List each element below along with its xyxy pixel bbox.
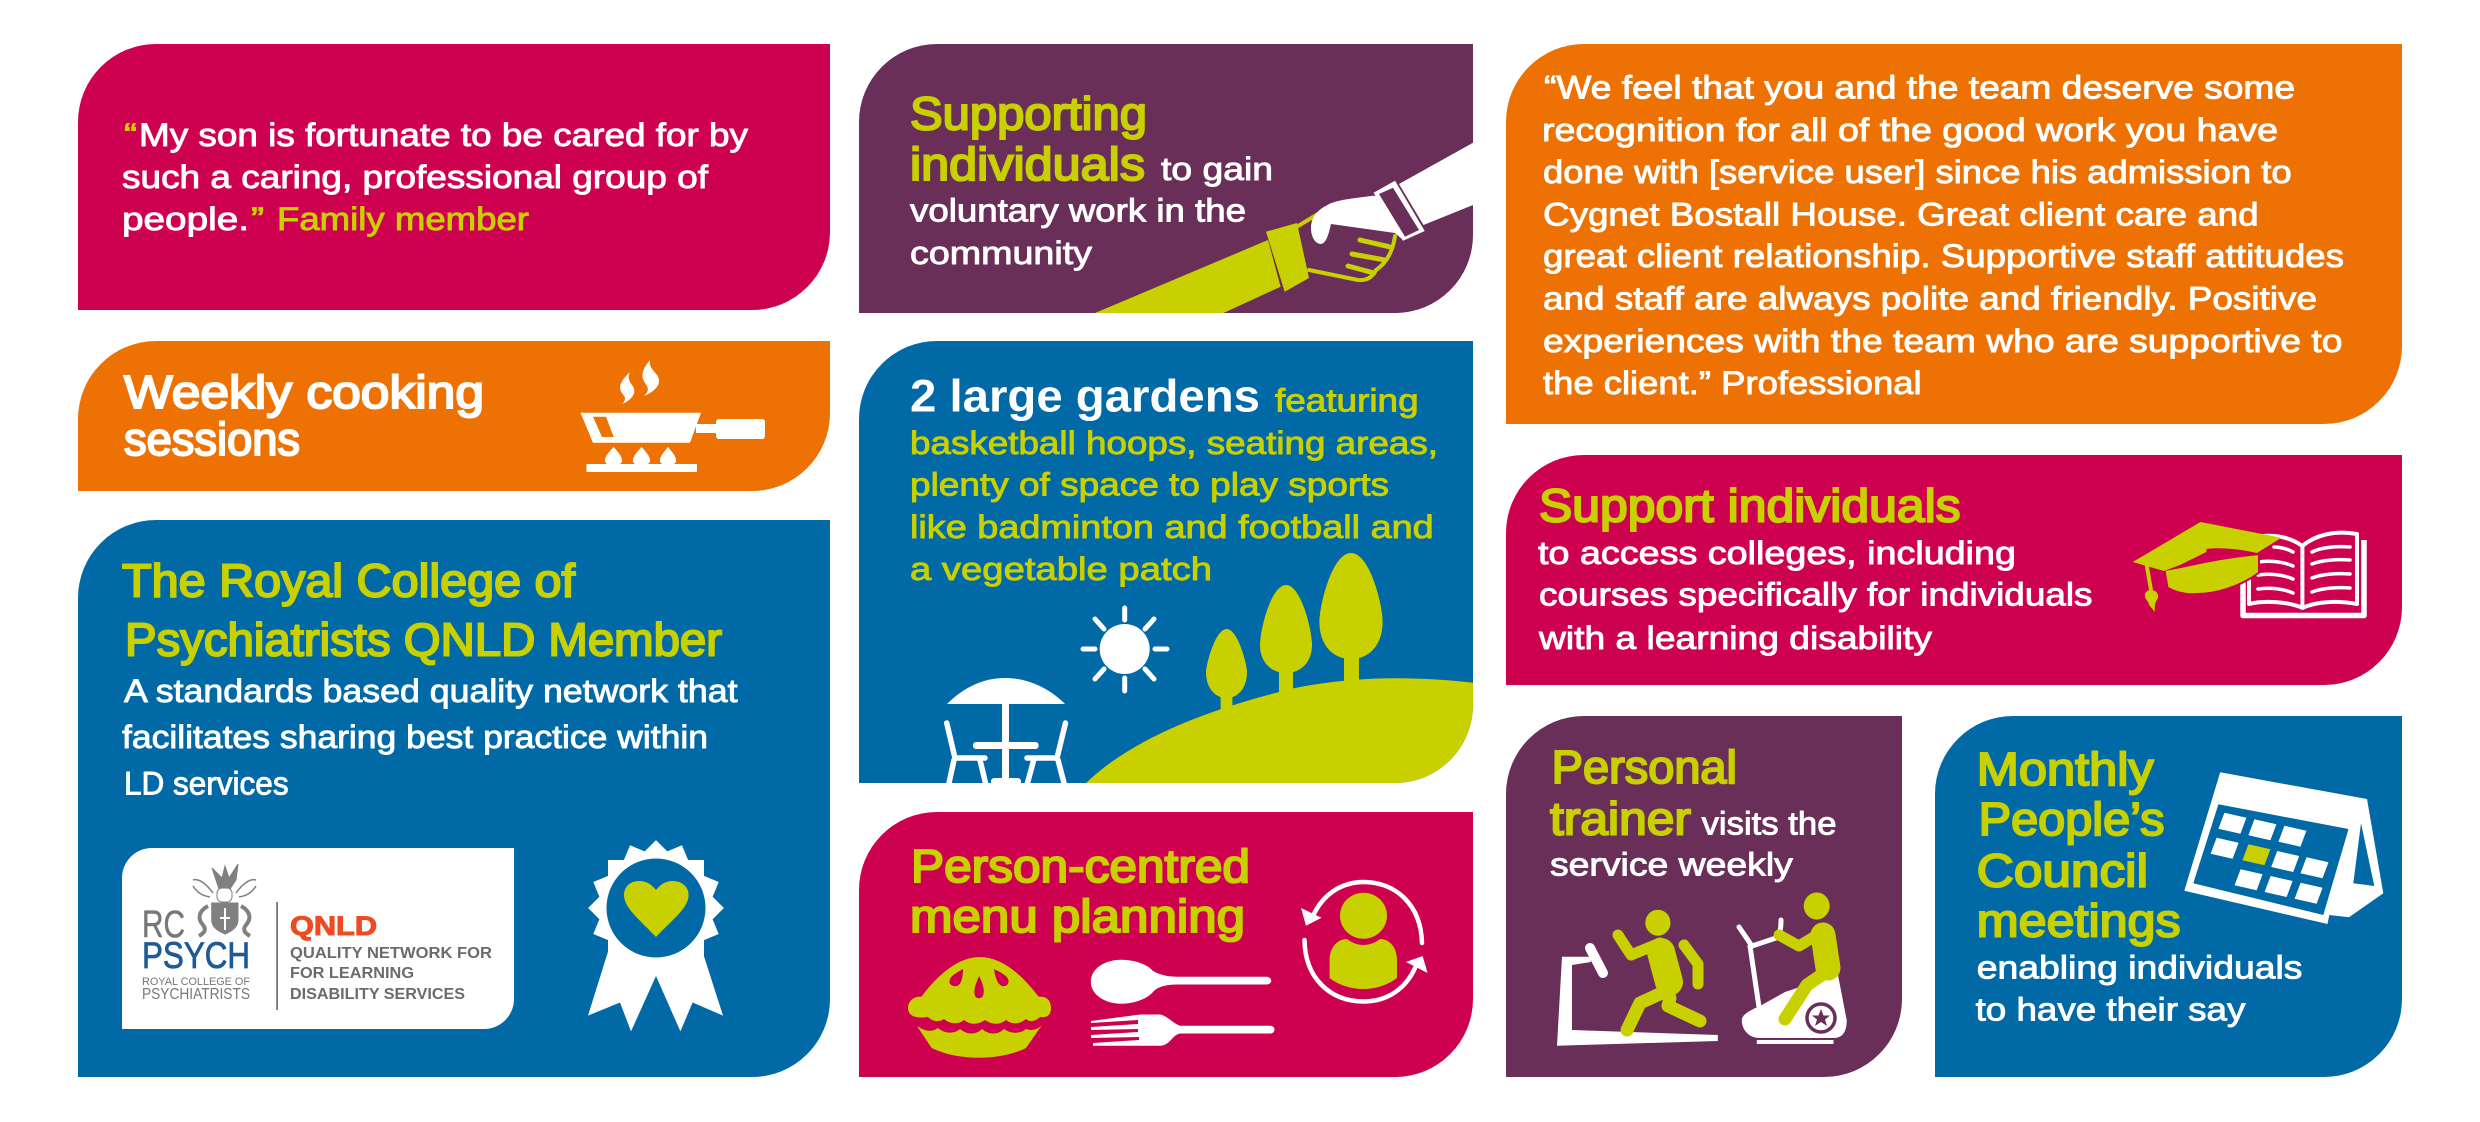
text: visits the: [1702, 805, 1836, 841]
text: [1538, 480, 2092, 656]
text: with a learning disability: [1538, 620, 1933, 656]
panel background: [78, 341, 830, 491]
quote text: Cygnet Bostall House. Great client care and: [1543, 196, 2259, 232]
quote text: My son is fortunate to be cared for by: [139, 117, 749, 153]
text: 2 large gardens: [910, 371, 1260, 422]
QNLD text: DISABILITY SERVICES: [290, 986, 465, 1003]
panel background: [1506, 44, 2402, 424]
quote text: [122, 117, 749, 237]
quote text: and staff are always polite and friendly. Positive: [1543, 280, 2317, 316]
description: facilitates sharing best practice within: [122, 719, 708, 755]
text: to access colleges, including: [1538, 535, 2016, 571]
quote text: the client.” Professional: [1543, 365, 1922, 401]
text: enabling individuals: [1977, 949, 2302, 985]
panel: Royal College of Psychiatrists QNLD member: [78, 520, 830, 1077]
panel: People's Council: [1935, 716, 2402, 1077]
text: [1976, 743, 2302, 1028]
quote text: people.: [122, 201, 249, 237]
description: A standards based quality network that: [124, 673, 737, 709]
panel: gardens: [859, 341, 1473, 783]
illustration: hill and trees: [1086, 553, 1473, 783]
wordmark: PSYCHIATRISTS: [142, 986, 250, 1003]
heading: Psychiatrists QNLD Member: [125, 614, 722, 666]
icon: person with circular arrows: [1301, 882, 1428, 1002]
heading: The Royal College of: [122, 554, 575, 606]
logo plate: [122, 848, 514, 1029]
text: courses specifically for individuals: [1539, 577, 2092, 613]
text: service weekly: [1550, 847, 1794, 883]
text: community: [910, 235, 1093, 271]
text: voluntary work in the: [910, 193, 1246, 229]
text: [910, 87, 1273, 271]
wordmark: RC: [142, 904, 185, 946]
icon: table and parasol: [947, 678, 1066, 783]
panel: menu planning: [859, 812, 1473, 1077]
quote text: such a caring, professional group of: [122, 159, 709, 195]
quote text: experiences with the team who are supportive to: [1543, 323, 2342, 359]
panel: voluntary work: [859, 44, 1473, 313]
heading: [122, 554, 722, 666]
QNLD text: QNLD: [290, 911, 377, 941]
icon: treadmill runner: [1557, 910, 1718, 1046]
quote text: ”: [251, 201, 264, 237]
icon: rosette with heart: [588, 840, 724, 1031]
icon: sun: [1083, 608, 1167, 691]
panel: family member quote: [78, 44, 830, 310]
text: Supporting: [910, 87, 1147, 139]
text: trainer: [1550, 792, 1691, 844]
text: plenty of space to play sports: [910, 467, 1389, 503]
panel background: [859, 44, 1473, 313]
text: basketball hoops, seating areas,: [910, 425, 1438, 461]
quote text: great client relationship. Supportive staff attitudes: [1543, 238, 2344, 274]
text: featuring: [1275, 383, 1419, 419]
text: Council: [1977, 845, 2148, 897]
text: like badminton and football and: [910, 509, 1434, 545]
icon: handshake: [1095, 143, 1473, 313]
quote text: “: [124, 117, 137, 153]
text: to gain: [1161, 151, 1273, 187]
panel background: [1506, 716, 1902, 1077]
wordmark: PSYCH: [142, 935, 250, 976]
QNLD text: [290, 911, 492, 1003]
panel background: [1506, 455, 2402, 685]
text: meetings: [1977, 895, 2181, 947]
icon: graduation cap: [2133, 522, 2281, 612]
icon: pie: [908, 957, 1051, 1058]
wordmark: ROYAL COLLEGE OF: [142, 976, 250, 988]
QNLD text: QUALITY NETWORK FOR: [290, 945, 492, 962]
quote text: recognition for all of the good work you have: [1542, 112, 2278, 148]
icon: open book: [2243, 533, 2364, 616]
panel background: [78, 520, 830, 1077]
description: LD services: [124, 766, 289, 802]
quote text: done with [service user] since his admission to: [1543, 154, 2292, 190]
wordmark: [142, 904, 250, 1003]
panel background: [859, 341, 1473, 783]
panel: weekly cooking sessions: [78, 341, 830, 491]
logo: RCPsych QNLD: [122, 848, 514, 1029]
description: [122, 673, 737, 802]
text: People’s: [1979, 793, 2164, 845]
panel: professional quote: [1506, 44, 2402, 424]
panel: personal trainer: [1506, 716, 1902, 1077]
heading: [124, 366, 484, 465]
heading: menu planning: [910, 890, 1245, 942]
text: Personal: [1552, 741, 1737, 793]
quote text: [1542, 69, 2344, 401]
icon: frying pan on hob: [580, 360, 765, 472]
heading: [910, 840, 1250, 942]
heading: Person-centred: [911, 840, 1250, 892]
panel background: [1935, 716, 2402, 1077]
panel background: [859, 812, 1473, 1077]
text: Monthly: [1977, 743, 2154, 795]
icon: coat of arms: [193, 864, 256, 936]
heading: sessions: [124, 413, 300, 465]
text: to have their say: [1976, 992, 2246, 1028]
panel: college access: [1506, 455, 2402, 685]
icon: spoon and fork: [1091, 960, 1274, 1046]
quote text: Family member: [277, 201, 529, 237]
heading: Weekly cooking: [124, 366, 484, 418]
text: a vegetable patch: [910, 551, 1212, 587]
QNLD text: FOR LEARNING: [290, 965, 414, 982]
text: [1550, 741, 1836, 883]
text: Support individuals: [1539, 480, 1961, 532]
text: individuals: [910, 138, 1145, 190]
icon: exercise bike rider: [1739, 892, 1847, 1044]
quote text: “We feel that you and the team deserve some: [1544, 69, 2295, 105]
icon: desk calendar: [2184, 772, 2383, 924]
panel background: [78, 44, 830, 310]
text: [910, 371, 1438, 587]
